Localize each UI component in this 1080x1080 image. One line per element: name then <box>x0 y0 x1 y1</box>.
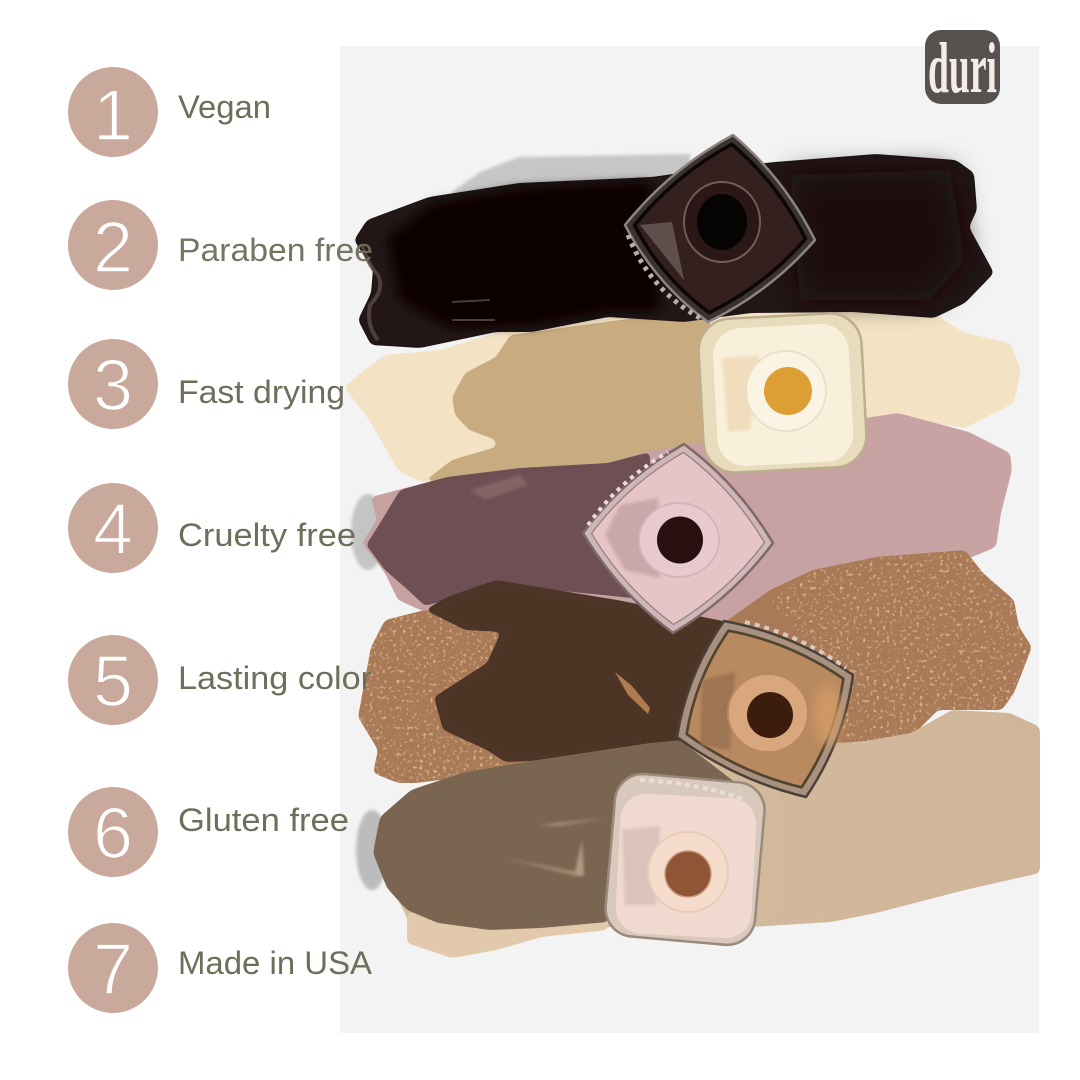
mauve shadow area <box>366 452 650 606</box>
list item 2: Paraben free: Paraben free <box>178 232 373 268</box>
bottle: beige <box>603 772 767 947</box>
bottle: bronze <box>677 621 853 797</box>
list item 1: Vegan <box>68 67 271 157</box>
bottle: dark <box>625 135 815 322</box>
panel: photo background <box>340 46 1039 1033</box>
cream shadow area <box>423 318 710 482</box>
swatch: bronze shimmer polish <box>358 550 1032 783</box>
swatch: mauve polish <box>362 413 1012 640</box>
shadow: cast on paper <box>351 154 690 890</box>
logo: duri: duri <box>928 28 997 108</box>
list item 6: Gluten free <box>68 787 349 877</box>
swatch: dark chocolate polish <box>354 154 994 348</box>
bronze shadow area <box>425 580 728 762</box>
list item 5: Lasting color <box>68 635 372 725</box>
list item 6: Gluten free: Gluten free <box>178 802 349 838</box>
logo: duri <box>925 28 1000 108</box>
list item 3: Fast drying: Fast drying <box>178 374 345 410</box>
beige shadow area <box>373 740 745 930</box>
list item 4: Cruelty free: Cruelty free <box>178 517 356 553</box>
swatch: cream polish <box>344 309 1021 482</box>
list item 2: Paraben free <box>68 200 373 290</box>
list item 5: Lasting color: Lasting color <box>178 660 372 696</box>
list item 7: Made in USA: Made in USA <box>178 945 373 981</box>
list item 2: Paraben free: 2 <box>93 208 133 288</box>
list item 5: Lasting color: 5 <box>93 642 133 722</box>
bottle: mauve <box>583 444 773 633</box>
photo: nail polish swatches <box>344 135 1040 958</box>
list item 6: Gluten free: 6 <box>93 794 133 874</box>
list item 1: Vegan: Vegan <box>178 89 271 125</box>
list item 1: Vegan: 1 <box>93 76 133 156</box>
list item 3: Fast drying: 3 <box>93 346 133 426</box>
list item 7: Made in USA: 7 <box>93 930 133 1010</box>
list item 3: Fast drying <box>68 339 345 429</box>
list item 7: Made in USA <box>68 923 373 1013</box>
list item 4: Cruelty free <box>68 483 356 573</box>
list item 4: Cruelty free: 4 <box>93 490 133 570</box>
swatch: beige polish <box>373 710 1040 958</box>
bottle: cream <box>697 312 868 474</box>
